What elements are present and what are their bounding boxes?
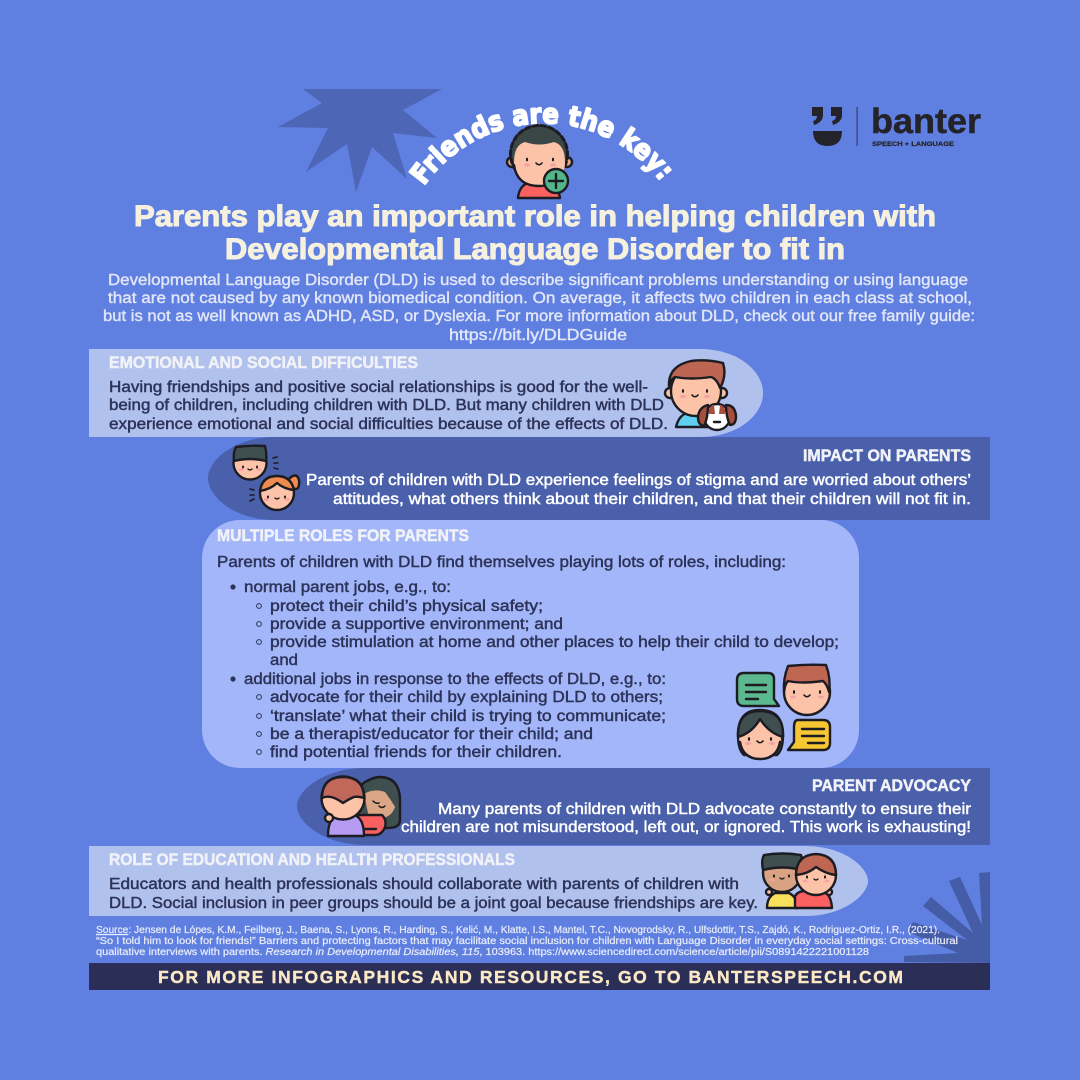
icon: two friends	[762, 854, 836, 908]
curved title: Friends are the key: Friends are the key:	[408, 106, 672, 186]
decorative burst: top left	[278, 89, 442, 192]
source citation: qualitative interviews with parents. Research in Developmental Disabilities, 115 , 103963. https://www.sciencedirect.com/science/article/pii/S0891422221001128	[96, 946, 869, 958]
icon: smiling child with plus badge	[507, 126, 572, 198]
intro text block: but is not as well known as ADHD, ASD, or Dyslexia. For more information about DLD, check out our free family guide:	[103, 308, 975, 325]
text: parent advocacy: Many parents of children with DLD advocate constantly to ensure their	[438, 801, 971, 818]
text: parent advocacy: children are not misunderstood, left out, or ignored. This work is exhausting!	[401, 819, 971, 836]
text: impact on parents: attitudes, what others think about their children, and that their children will not fit in.	[333, 491, 971, 508]
footer banner	[89, 963, 990, 990]
panel: role of education and health professionals	[89, 846, 868, 916]
main heading	[134, 200, 936, 266]
heading: parent advocacy: PARENT ADVOCACY	[812, 777, 971, 795]
text: role of professionals: DLD. Social inclusion in peer groups should be a joint goal because friendships are key.	[109, 895, 758, 912]
text: impact on parents	[306, 472, 971, 508]
icon: boy with puppy	[665, 360, 736, 430]
panel: multiple roles for parents	[202, 520, 859, 768]
panel: parent advocacy	[297, 768, 990, 845]
text: role of professionals: Educators and health professionals should collaborate with parents of children with	[109, 876, 739, 893]
text: roles intro: Parents of children with DLD find themselves playing lots of roles, including:	[217, 554, 786, 571]
list: normal parent jobs: protect their child’s physical safety;	[270, 598, 543, 615]
panel: emotional and social difficulties	[89, 349, 763, 437]
list: additional jobs: be a therapist/educator for their child; and	[270, 726, 593, 743]
list: normal parent jobs: provide stimulation at home and other places to help their child to develop;	[270, 634, 839, 651]
text: role of professionals	[109, 876, 758, 912]
text: impact on parents: Parents of children with DLD experience feelings of stigma and are worried about others’	[306, 472, 971, 489]
list: normal parent jobs: and	[270, 652, 298, 669]
list: additional jobs	[230, 671, 666, 761]
text: parent advocacy	[401, 801, 971, 836]
text: emotional and social difficulties: Having friendships and positive social relationships is good for the well-	[109, 379, 648, 396]
source citation: Source: Jensen de Lópes, K.M., Feilberg, J., Baena, S., Lyons, R., Harding, S., Kelić, M., Klatte, I.S., Mantel, T.C., Novogrodsky, R., Ulfsdottir, T.S., Zajdó, K., Rodriguez-Ortiz, I.R., (2021).	[96, 924, 940, 936]
list: additional jobs: find potential friends for their children.	[270, 744, 562, 761]
list: additional jobs: advocate for their child by explaining DLD to others;	[270, 689, 663, 706]
panel: impact on parents	[208, 437, 990, 520]
list: additional jobs: ‘translate’ what their child is trying to communicate;	[270, 708, 666, 725]
main heading: Developmental Language Disorder to fit in	[225, 233, 845, 266]
icon: two talking children	[234, 446, 299, 510]
logo: banter speech and language: banter	[871, 102, 981, 141]
icon: logo face	[812, 107, 858, 146]
source citation: “So I told him to look for friends!” Barriers and protecting factors that may facilitate social inclusion for children with Language Disorder in everyday social settings: Cross-cultural	[96, 935, 958, 947]
intro text block	[103, 272, 975, 344]
heading: emotional and social difficulties: EMOTIONAL AND SOCIAL DIFFICULTIES	[109, 354, 418, 372]
footer banner: FOR MORE INFOGRAPHICS AND RESOURCES, GO TO BANTERSPEECH.COM	[158, 967, 903, 987]
intro text block: https://bit.ly/DLDGuide	[449, 327, 627, 344]
main heading: Parents play an important role in helping children with	[134, 200, 936, 233]
list: normal parent jobs: provide a supportive environment; and	[270, 616, 563, 633]
list: normal parent jobs	[230, 579, 839, 669]
text: emotional and social difficulties: being of children, including children with DLD. But many children with DLD	[109, 397, 664, 414]
list: additional jobs: additional jobs in response to the effects of DLD, e.g., to:	[244, 671, 666, 688]
heading: role of education and health professionals: ROLE OF EDUCATION AND HEALTH PROFESSIONALS	[109, 851, 515, 869]
intro text block: Developmental Language Disorder (DLD) is used to describe significant problems understanding or using language	[108, 272, 968, 289]
text: emotional and social difficulties	[109, 379, 668, 433]
source citation	[96, 924, 958, 958]
decorative burst: bottom right	[904, 872, 990, 963]
heading: multiple roles for parents: MULTIPLE ROLES FOR PARENTS	[217, 527, 469, 545]
list: normal parent jobs: normal parent jobs, e.g., to:	[244, 579, 451, 596]
logo: banter speech and language: SPEECH + LANGUAGE	[872, 141, 955, 148]
intro text block: that are not caused by any known biomedical condition. On average, it affects two children in each class at school,	[108, 290, 972, 307]
logo: banter speech and language	[812, 102, 981, 148]
icon: parent hugging child	[322, 776, 400, 836]
text: emotional and social difficulties: experience emotional and social difficulties because of the effects of DLD.	[109, 416, 668, 433]
icon: two people with speech bubbles	[737, 665, 830, 759]
heading: impact on parents: IMPACT ON PARENTS	[803, 447, 971, 465]
